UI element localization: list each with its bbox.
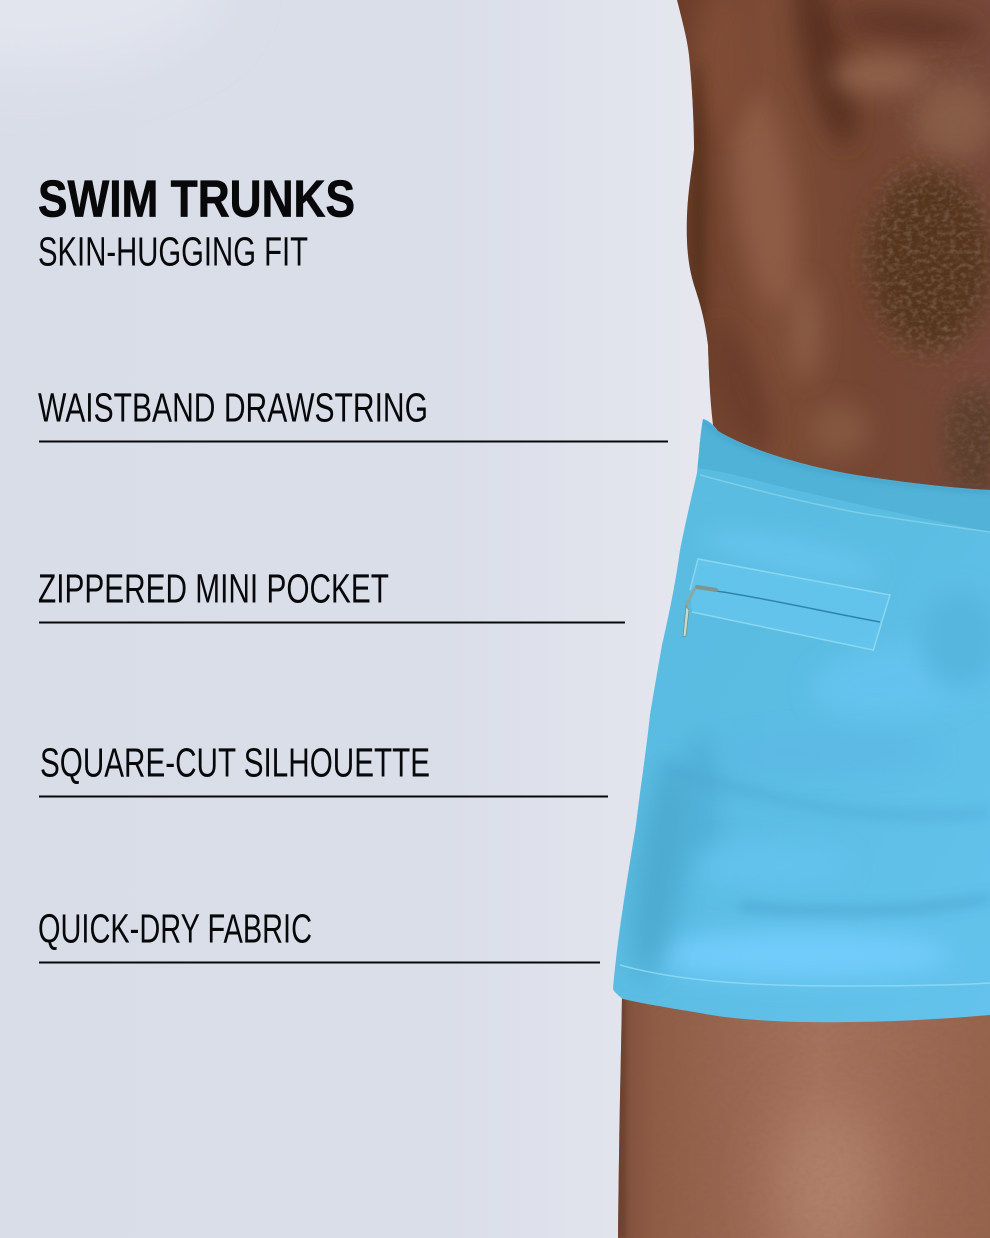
title: SWIM TRUNKS: SWIM TRUNKS: [38, 170, 355, 228]
feature: quick-dry fabric: QUICK-DRY FABRIC: [38, 906, 312, 952]
photo: thigh: [610, 990, 990, 1238]
photo: blue swim trunks: [600, 410, 990, 1030]
waistband seam: [700, 475, 990, 532]
feature: square-cut silhouette: SQUARE-CUT SILHOUETTE: [40, 740, 430, 786]
feature: waistband drawstring: WAISTBAND DRAWSTRING: [38, 384, 428, 430]
photo: torso: [670, 0, 990, 520]
zipper pocket: [683, 559, 890, 651]
hem stitching: [620, 965, 990, 986]
subtitle: SKIN-HUGGING FIT: [38, 228, 308, 274]
feature: zippered mini pocket: ZIPPERED MINI POCKET: [38, 566, 389, 612]
